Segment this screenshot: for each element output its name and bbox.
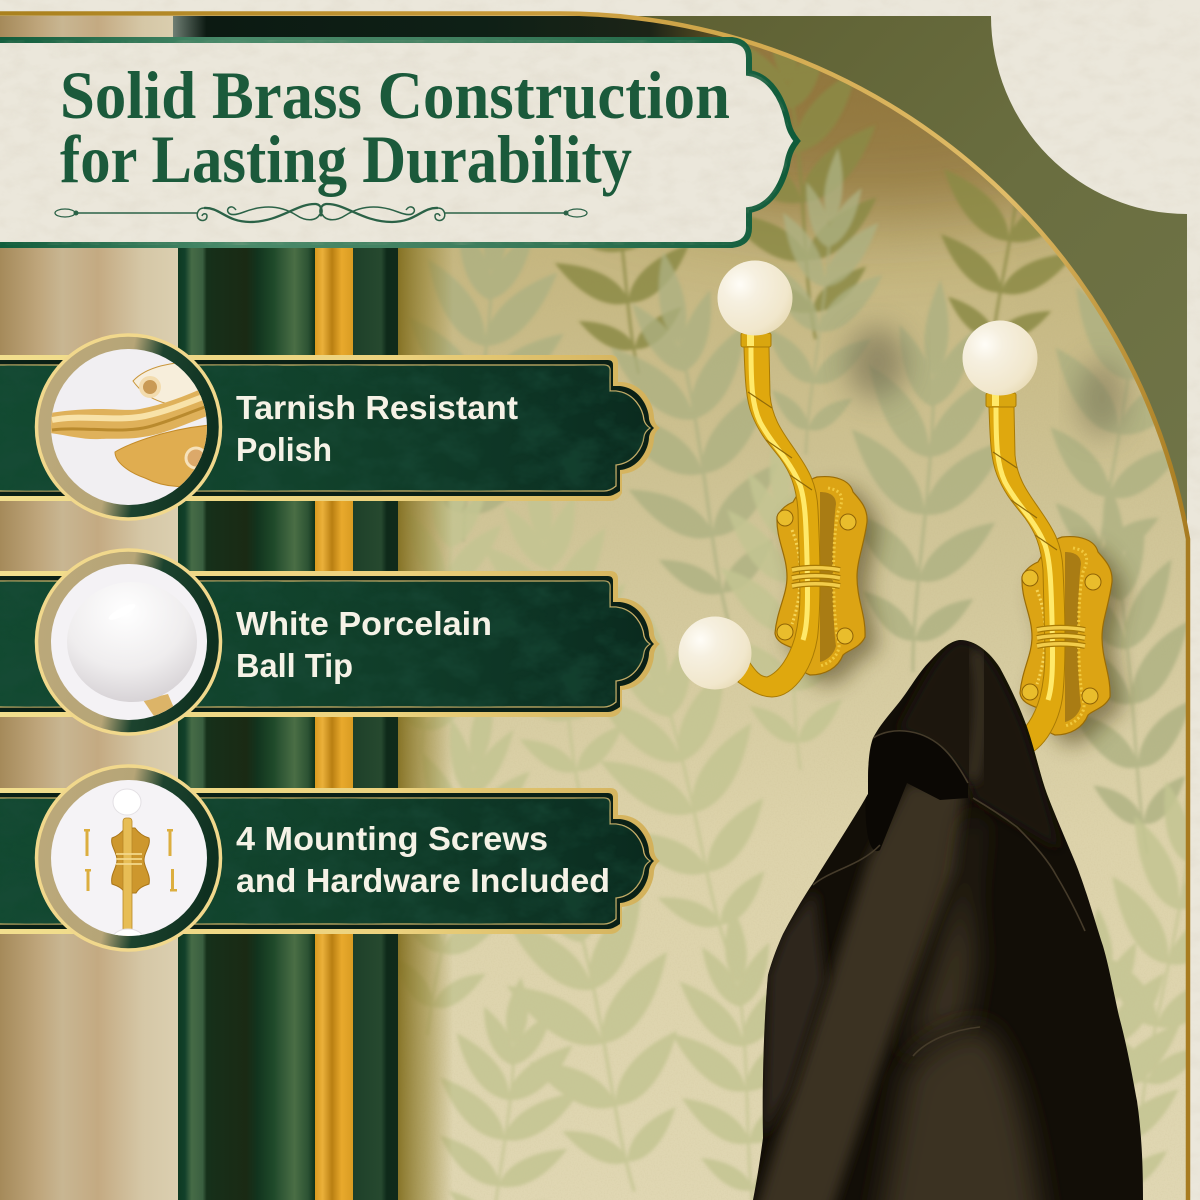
- dark frame top behind banner: [173, 16, 722, 37]
- coat seams: [813, 731, 1085, 1056]
- label: Ball Tip: [236, 647, 353, 684]
- brass hook right: [962, 320, 1124, 757]
- medallion: white ball: [36, 550, 220, 734]
- green moulding right: [353, 248, 398, 1200]
- feature 3: mounting screws and hardware: [0, 766, 660, 950]
- title: for Lasting Durability: [60, 121, 632, 197]
- beige wall panel: [0, 0, 178, 1200]
- feature 1: tarnish resistant polish: [0, 335, 660, 519]
- lit lower panel: [875, 1028, 1045, 1200]
- olive wall outside the arch: [638, 16, 1187, 522]
- medallion: polished brass arm: [36, 335, 220, 519]
- label: 4 Mounting Screws: [236, 820, 548, 857]
- label: [236, 605, 492, 684]
- coat shoulder peak: [897, 640, 1060, 850]
- gold frame strip: [315, 248, 353, 1200]
- title: [60, 57, 730, 197]
- ribbon: [0, 788, 660, 934]
- lit left sleeve: [763, 890, 825, 1138]
- medallion: hook with screws: [36, 766, 220, 950]
- wallpaper: [398, 44, 1186, 1200]
- black coat hanging: [750, 636, 1146, 1200]
- ribbon: [0, 355, 660, 501]
- brass hook left: [678, 260, 879, 697]
- label: Polish: [236, 431, 332, 468]
- banner shape: [0, 40, 797, 245]
- green moulding: [178, 248, 315, 1200]
- label: White Porcelain: [236, 605, 492, 642]
- lit fold left: [750, 783, 965, 1200]
- label: and Hardware Included: [236, 862, 610, 899]
- collar shadow: [866, 731, 968, 851]
- lit fold right: [905, 805, 978, 1060]
- label: [236, 820, 610, 899]
- title: Solid Brass Construction: [60, 57, 730, 133]
- feature 2: white porcelain ball tip: [0, 550, 660, 734]
- ribbon: [0, 571, 660, 717]
- title banner: [0, 40, 800, 246]
- label: Tarnish Resistant: [236, 389, 518, 426]
- ornamental divider: [55, 204, 587, 222]
- label: [236, 389, 518, 468]
- lower porcelain ball: [678, 616, 752, 690]
